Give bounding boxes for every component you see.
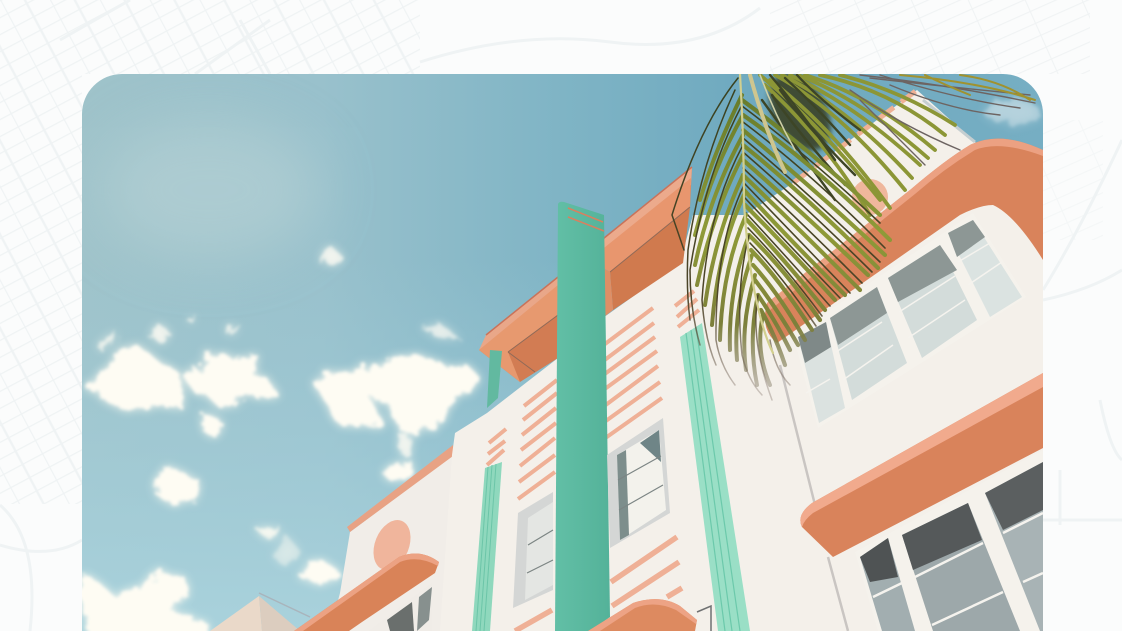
shadow lines on wall (780, 365, 848, 631)
sky (82, 74, 1043, 631)
thin brown tips (672, 78, 790, 400)
upper right awning (765, 139, 1043, 343)
green stripe left (472, 462, 502, 631)
upper right window (793, 213, 1026, 428)
upper frond leaflets (760, 75, 955, 215)
bottom centre awning (588, 599, 711, 631)
photo: art deco building (82, 63, 1043, 631)
green column (555, 202, 610, 631)
roof overhang left (479, 277, 558, 382)
pink circle ornament (374, 520, 410, 569)
neighbouring building (210, 593, 310, 631)
small green column (487, 350, 502, 408)
lower right window (855, 450, 1043, 631)
main left leaflets (695, 95, 770, 385)
lower left awning (294, 553, 439, 631)
pink stripes (487, 291, 699, 631)
main right leaflets (742, 100, 890, 365)
palm frond (672, 63, 1035, 400)
window left (513, 492, 553, 608)
green stripe right (680, 323, 750, 631)
frond rachis (740, 74, 773, 353)
lower right awning (800, 373, 1043, 557)
dark shadow mass (764, 74, 836, 155)
pink roundel under palm (852, 179, 888, 215)
roof overhang right (604, 166, 692, 316)
left wing cornice (347, 445, 453, 532)
thin right leaflets (850, 75, 1035, 165)
dark upper leaflets (762, 75, 860, 200)
main wall (440, 90, 1043, 631)
clouds (82, 100, 1040, 631)
parapet edge (793, 90, 917, 183)
left wing wall (338, 456, 452, 631)
lower left window (387, 587, 432, 631)
pale leaflets (750, 75, 785, 172)
window centre (607, 418, 670, 548)
